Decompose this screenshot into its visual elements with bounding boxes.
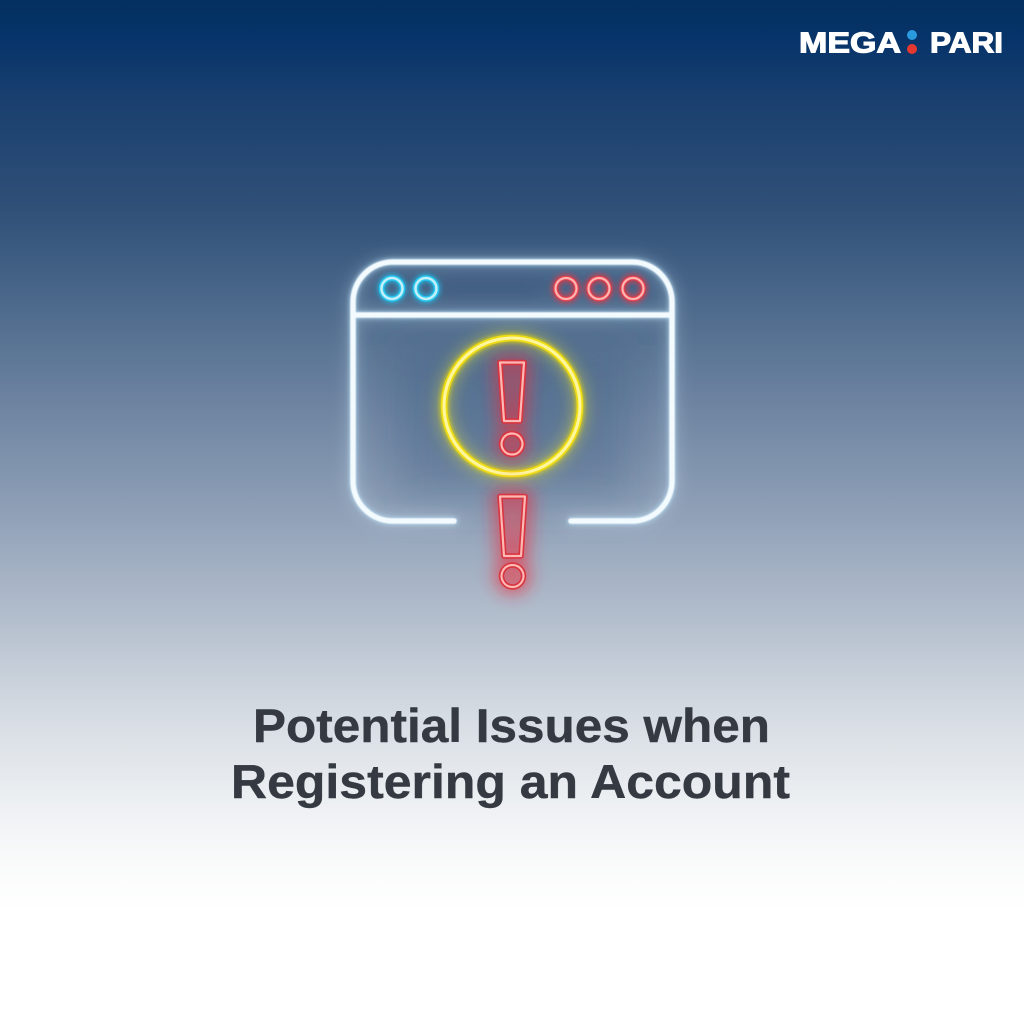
red window buttons <box>556 278 644 299</box>
title line 1: Potential Issues when <box>253 699 770 752</box>
logo word PARI: PARI <box>930 28 1003 60</box>
red exclamation mark below window <box>500 496 525 587</box>
logo blue dot <box>907 30 917 40</box>
title <box>231 699 790 808</box>
title line 2: Registering an Account <box>231 755 790 808</box>
red exclamation mark inside circle <box>500 362 524 455</box>
logo word MEGA: MEGA <box>799 28 901 60</box>
yellow warning circle <box>444 338 580 474</box>
icon: neon browser window with warnings <box>353 262 672 587</box>
logo: MEGA PARI <box>799 28 1003 60</box>
blue window buttons <box>382 278 436 299</box>
browser window frame <box>353 262 672 521</box>
logo red dot <box>907 44 917 54</box>
